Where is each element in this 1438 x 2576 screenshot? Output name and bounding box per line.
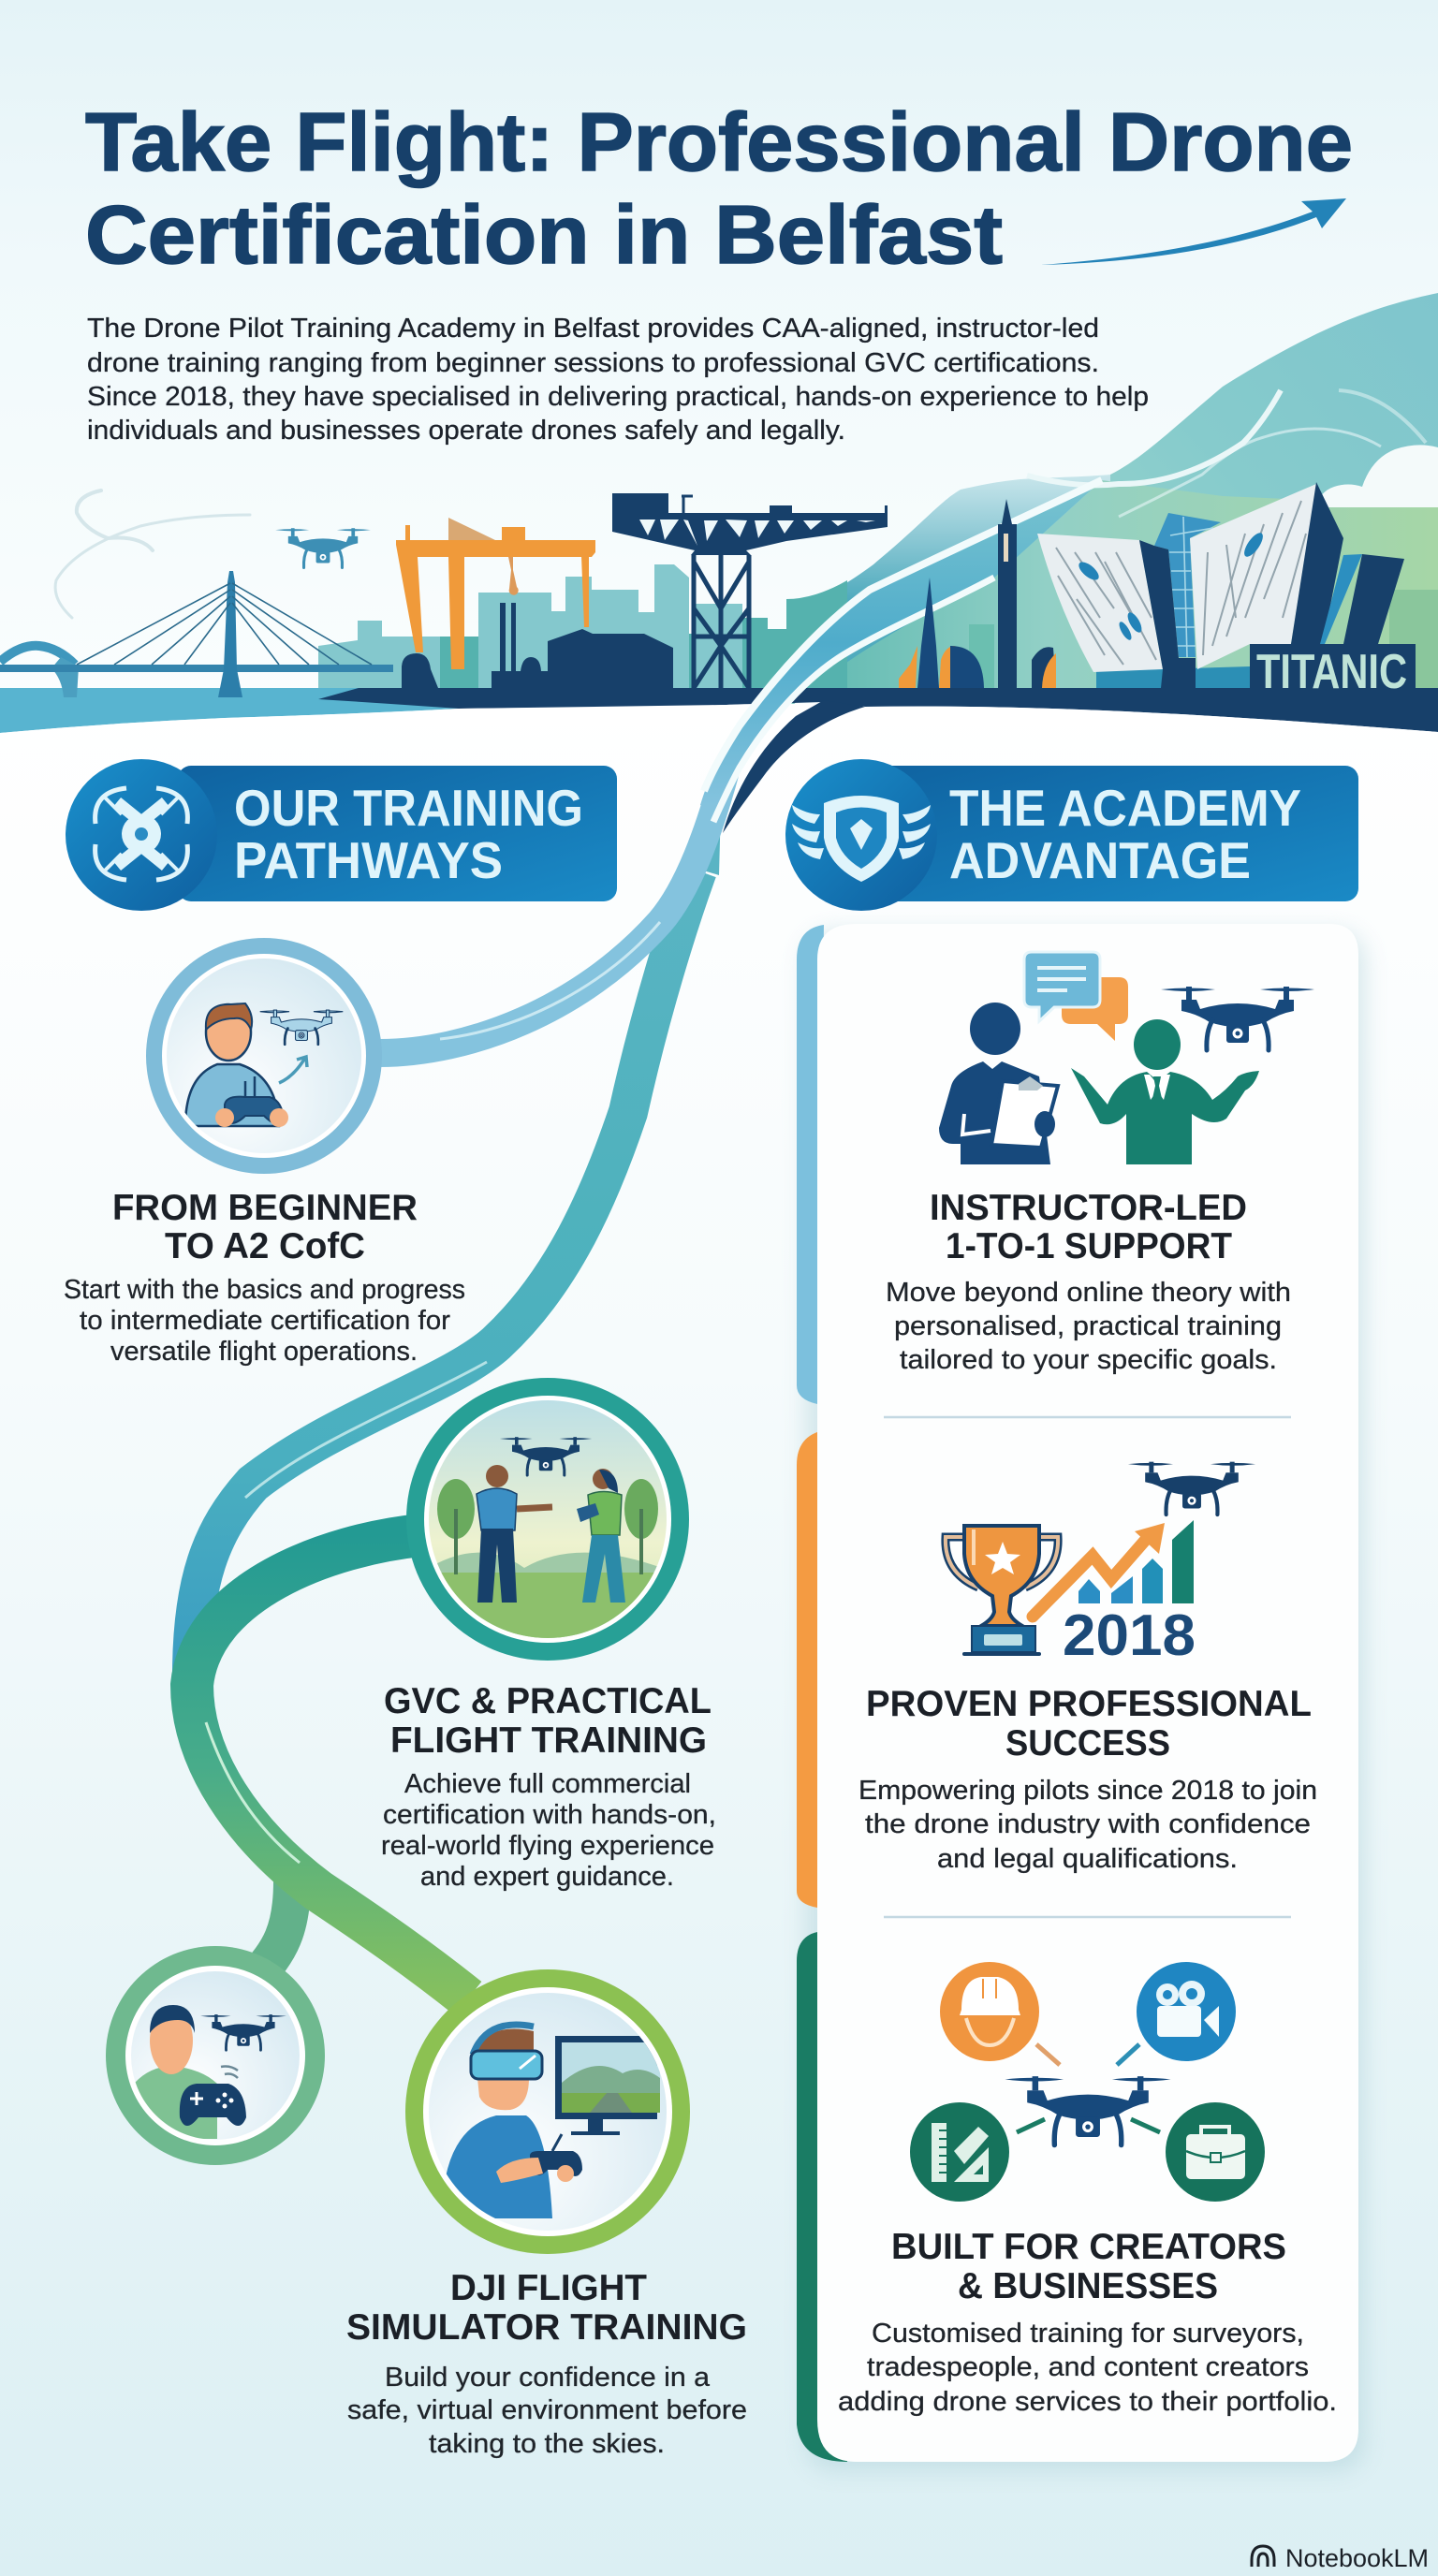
accent tab: orange <box>797 1430 824 1908</box>
green ribbon <box>192 1535 468 1998</box>
lower page background <box>0 704 1438 2576</box>
text: built for creators <box>838 2227 1337 2417</box>
text: simulator: Build your confidence in a <box>385 2363 711 2393</box>
page background <box>0 0 1438 749</box>
text: instructor-led <box>886 1188 1291 1375</box>
icon: pilot with controller and drone <box>185 1003 343 1127</box>
spires <box>899 499 1056 688</box>
panel: Belfast skyline <box>0 293 1438 822</box>
icon: video camera <box>1137 1962 1236 2061</box>
text: built for creators: & BUSINESSES <box>958 2266 1218 2306</box>
left wisps <box>55 490 250 618</box>
text: proven success: PROVEN PROFESSIONAL <box>866 1684 1312 1724</box>
title: Take Flight: Professional Drone <box>85 95 1353 188</box>
icon: drone hub with four audiences <box>910 1962 1265 2202</box>
icon: hard hat <box>940 1962 1039 2061</box>
icon: instructor and student <box>939 952 1314 1164</box>
section header: our training pathways: OUR TRAINING <box>234 779 583 837</box>
text: GVC: GVC & PRACTICAL <box>384 1681 712 1721</box>
section header: the academy advantage <box>785 759 1358 911</box>
background buildings <box>318 564 742 688</box>
icon: briefcase <box>1166 2102 1265 2202</box>
title <box>85 95 1353 281</box>
icon: trophy and growth chart <box>946 1462 1255 1668</box>
intro text: The Drone Pilot Training Academy in Belfast provides CAA-aligned, instructor-led <box>87 314 1099 344</box>
text: beginner: TO A2 CofC <box>165 1226 365 1266</box>
pathway node: gamepad <box>106 1946 325 2165</box>
intro text <box>87 314 1149 446</box>
pathway node: GVC <box>406 1378 689 1661</box>
accent tab: blue <box>797 925 824 1404</box>
icon: trophy and growth chart: 2018 <box>1063 1603 1196 1668</box>
distant right building <box>1389 590 1438 693</box>
intro text: drone training ranging from beginner sessions to professional GVC certifications. <box>87 348 1099 378</box>
gamepad branch <box>253 1881 292 1980</box>
icon: skyline drone <box>275 528 371 567</box>
text: instructor-led: tailored to your specific goals. <box>900 1345 1277 1375</box>
text: GVC: real-world flying experience <box>381 1831 714 1861</box>
text: GVC: Achieve full commercial <box>404 1769 691 1799</box>
text: GVC: and expert guidance. <box>420 1862 674 1892</box>
text: built for creators: adding drone services to their portfolio. <box>838 2387 1337 2417</box>
icon: drone top view <box>95 788 187 880</box>
text: proven success: Empowering pilots since 2018 to join <box>858 1776 1317 1806</box>
section header: the academy advantage: ADVANTAGE <box>949 831 1251 889</box>
Titanic Belfast building <box>1037 482 1404 688</box>
ribbon behind the spires <box>700 480 1102 822</box>
panel: academy advantage card <box>797 924 1365 2471</box>
text: built for creators: BUILT FOR CREATORS <box>891 2227 1286 2267</box>
text: simulator: SIMULATOR TRAINING <box>346 2307 747 2348</box>
intro text: individuals and businesses operate drones safely and legally. <box>87 416 845 446</box>
icon: swoosh arrow <box>1041 198 1346 265</box>
section header: the academy advantage: THE ACADEMY <box>949 779 1301 837</box>
icon: ruler and pencil <box>910 2102 1009 2202</box>
swirling wind lines <box>1027 390 1426 517</box>
intro text: Since 2018, they have specialised in delivering practical, hands-on experience to help <box>87 382 1149 412</box>
section header: our training pathways <box>66 759 617 911</box>
navy dockside silhouettes <box>318 603 1438 732</box>
text: instructor-led: INSTRUCTOR-LED <box>930 1188 1247 1228</box>
light blue branch <box>379 768 726 1053</box>
icon: VR pilot with monitor <box>442 2025 660 2218</box>
cloud <box>1315 445 1438 507</box>
text: proven success <box>858 1684 1317 1874</box>
text: proven success: SUCCESS <box>1005 1723 1170 1764</box>
text: built for creators: Customised training for surveyors, <box>872 2319 1304 2349</box>
title: Certification in Belfast <box>85 188 1003 281</box>
text: beginner: FROM BEGINNER <box>112 1188 418 1228</box>
icon: pilot with gamepad <box>135 2005 286 2139</box>
lower teal-green land <box>786 480 1438 711</box>
upper ribbon band <box>700 688 807 824</box>
icon: winged shield <box>792 796 931 882</box>
orange gantry crane <box>396 518 595 669</box>
Finnieston crane <box>612 493 888 688</box>
text: proven success: and legal qualifications. <box>937 1844 1238 1874</box>
main teal ribbon <box>192 871 697 1676</box>
hills <box>1102 293 1438 693</box>
text: simulator: taking to the skies. <box>429 2429 665 2459</box>
NotebookLM watermark: NotebookLM <box>1285 2544 1429 2572</box>
text: beginner: Start with the basics and progress <box>64 1275 465 1305</box>
left hill lobe <box>786 475 1110 693</box>
text: built for creators: tradespeople, and content creators <box>867 2352 1309 2382</box>
text: GVC <box>381 1681 716 1892</box>
text: proven success: the drone industry with confidence <box>865 1809 1311 1839</box>
text: GVC: certification with hands-on, <box>383 1800 716 1830</box>
navy wedge beneath ribbon <box>723 700 865 833</box>
text: instructor-led: 1-TO-1 SUPPORT <box>946 1226 1232 1266</box>
text: simulator <box>346 2268 747 2459</box>
card body <box>817 924 1358 2462</box>
water <box>0 688 459 733</box>
mid teal buildings <box>431 580 847 688</box>
text: beginner: versatile flight operations. <box>110 1337 418 1367</box>
pathway ribbon <box>192 480 1102 1998</box>
text: GVC: FLIGHT TRAINING <box>390 1720 707 1761</box>
ribbon junction taper <box>688 805 721 875</box>
text: beginner <box>64 1188 465 1367</box>
icon: instructor and student in a field <box>437 1437 658 1638</box>
text: simulator: DJI FLIGHT <box>450 2268 647 2308</box>
section header: our training pathways: PATHWAYS <box>234 831 503 889</box>
bridge <box>0 571 393 697</box>
text: instructor-led: Move beyond online theory with <box>886 1278 1291 1308</box>
pathway node: simulator <box>405 1969 690 2254</box>
text: simulator: safe, virtual environment before <box>347 2395 747 2425</box>
accent tab: green <box>797 1931 847 2462</box>
pathway node: beginner <box>146 938 382 1174</box>
text: instructor-led: personalised, practical training <box>894 1311 1282 1341</box>
text: beginner: to intermediate certification for <box>80 1306 450 1336</box>
